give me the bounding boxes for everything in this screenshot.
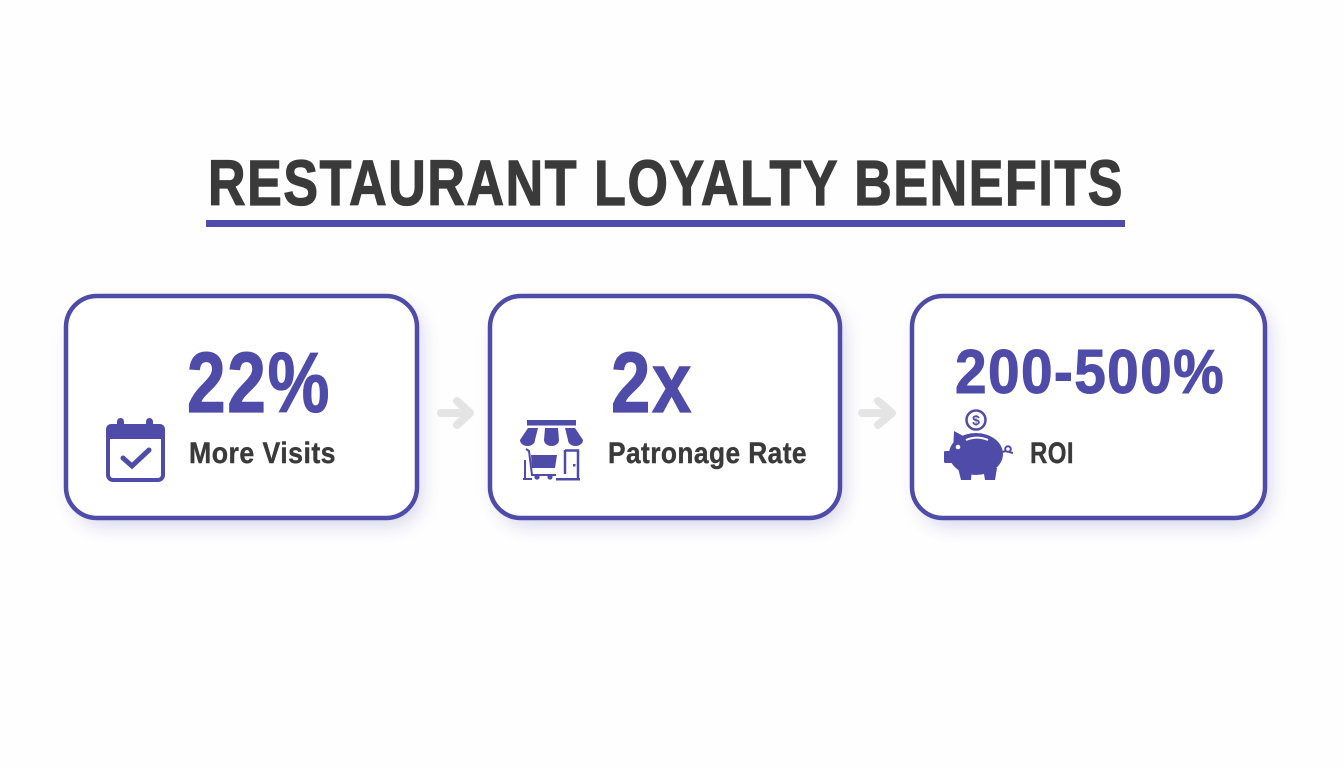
icon: piggy bank with coin: [944, 410, 1013, 480]
panel: ROI: [912, 296, 1270, 526]
panel: more visits: [66, 296, 422, 526]
panel: patronage rate: [490, 296, 845, 526]
icon: calendar with check: [106, 418, 165, 480]
label: patronage rate: Patronage Rate: [608, 437, 807, 470]
icon: storefront with cart: [520, 420, 583, 480]
label: ROI: ROI: [1030, 437, 1074, 470]
stat: 200-500%: 200-500%: [955, 338, 1225, 407]
title: RESTAURANT LOYALTY BENEFITS: [208, 147, 1124, 219]
arrow: [862, 401, 892, 425]
stat: 22%: 22%: [187, 336, 331, 431]
title underline: [206, 220, 1125, 227]
stat: 2x: 2x: [611, 336, 693, 431]
arrow: [441, 401, 470, 425]
icon: piggy bank with coin: $: [972, 412, 980, 428]
label: more visits: More Visits: [189, 437, 336, 470]
